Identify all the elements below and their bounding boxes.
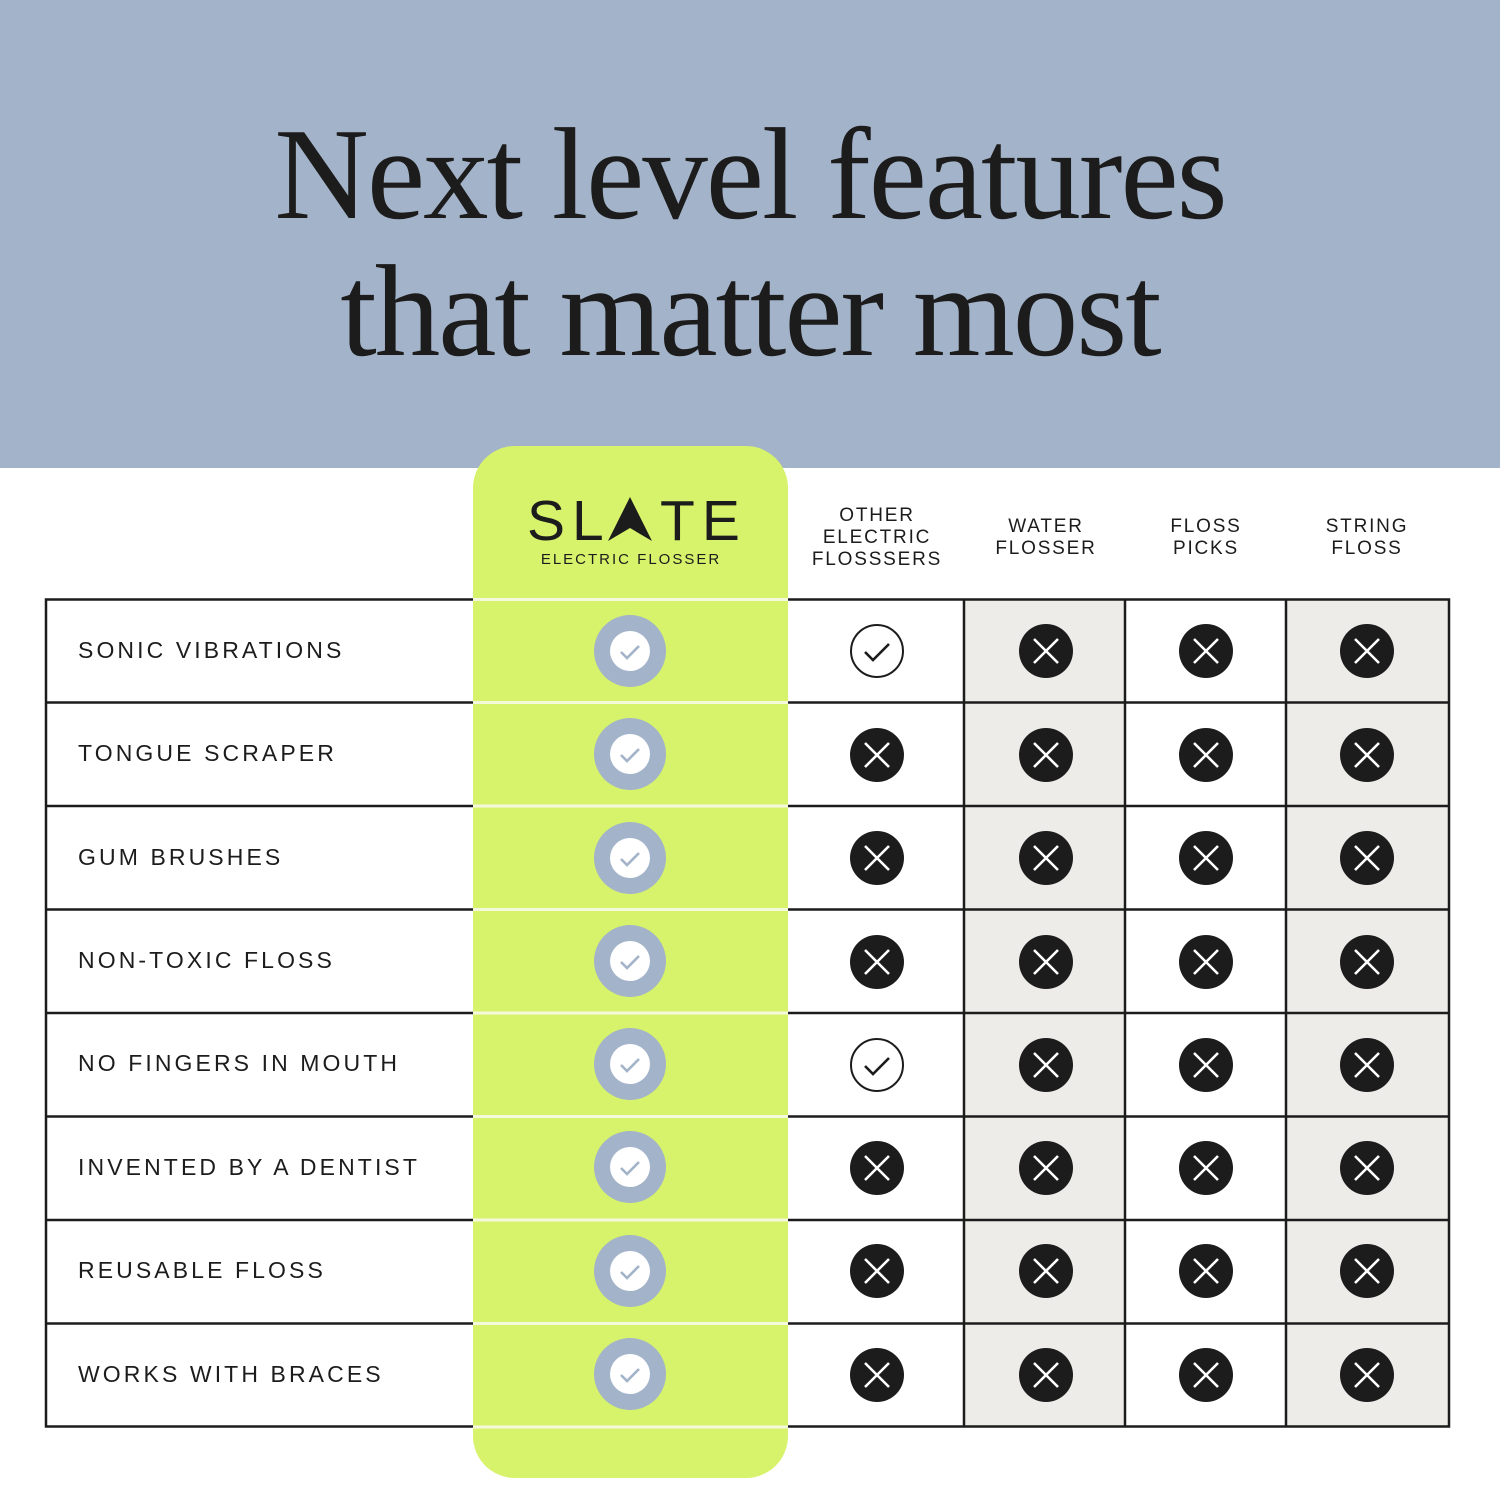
slate column bbox=[473, 446, 788, 1478]
row labels: TONGUE SCRAPER bbox=[78, 740, 337, 766]
title: that matter most bbox=[340, 239, 1160, 384]
row labels: REUSABLE FLOSS bbox=[78, 1257, 326, 1283]
slate checks bbox=[594, 615, 666, 1410]
title bbox=[274, 102, 1226, 384]
column headers: FLOSSSERS bbox=[812, 549, 942, 570]
logo: SLATE: ELECTRIC FLOSSER bbox=[541, 551, 721, 568]
column headers: PICKS bbox=[1173, 538, 1239, 559]
column headers: WATER bbox=[1008, 516, 1084, 537]
floss picks icons bbox=[1179, 624, 1233, 1402]
row labels: GUM BRUSHES bbox=[78, 844, 283, 870]
row labels: SONIC VIBRATIONS bbox=[78, 637, 344, 663]
string floss icons bbox=[1340, 624, 1394, 1402]
title: Next level features bbox=[274, 102, 1226, 247]
water flosser icons bbox=[1019, 624, 1073, 1402]
column headers: OTHER bbox=[839, 505, 915, 526]
column headers: ELECTRIC bbox=[823, 527, 931, 548]
column headers: FLOSS bbox=[1331, 538, 1403, 559]
row labels: WORKS WITH BRACES bbox=[78, 1361, 384, 1387]
logo: SLATE: TE bbox=[660, 489, 747, 553]
logo: SLATE bbox=[527, 489, 747, 568]
row labels: INVENTED BY A DENTIST bbox=[78, 1154, 420, 1180]
row labels: NO FINGERS IN MOUTH bbox=[78, 1050, 400, 1076]
row labels bbox=[78, 637, 420, 1387]
row labels: NON-TOXIC FLOSS bbox=[78, 947, 335, 973]
column headers: STRING bbox=[1326, 516, 1408, 537]
other electric column icons bbox=[850, 625, 904, 1402]
column headers: FLOSSER bbox=[995, 538, 1097, 559]
column headers: FLOSS bbox=[1170, 516, 1242, 537]
shaded columns bbox=[964, 599, 1449, 1427]
logo: SLATE: SL bbox=[527, 489, 611, 553]
column headers bbox=[812, 505, 1408, 570]
header band bbox=[0, 0, 1500, 468]
grid lines bbox=[46, 599, 1449, 1427]
